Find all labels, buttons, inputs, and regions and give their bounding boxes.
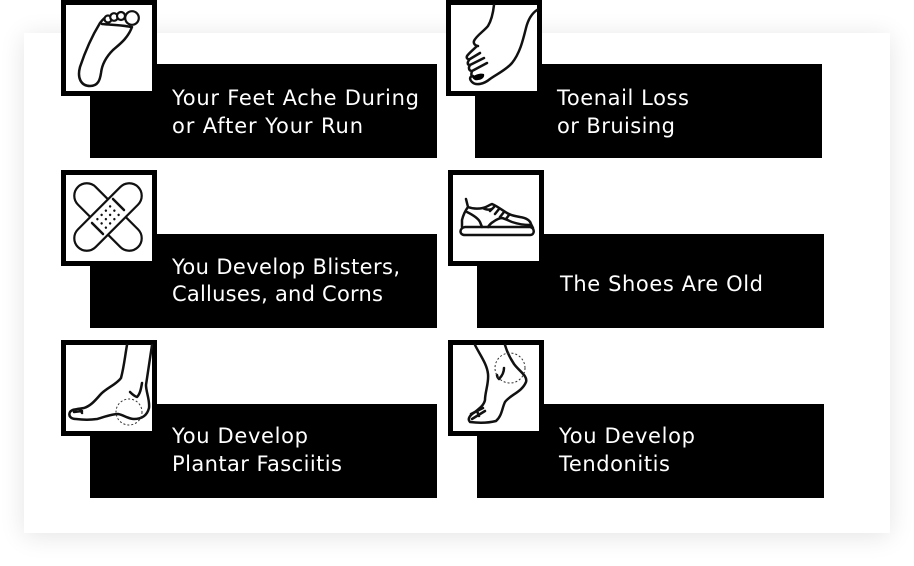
icon: foot sole xyxy=(64,2,154,94)
bruised toenail xyxy=(472,74,484,80)
label panel: plantar fasciitis: Plantar Fasciitis xyxy=(172,452,342,476)
icon: sneaker xyxy=(450,172,542,264)
label panel: toenail loss: Toenail Loss xyxy=(556,86,689,110)
bandage pad dots xyxy=(96,205,120,229)
dashed heel circle xyxy=(116,399,142,425)
label panel: tendonitis: You Develop xyxy=(558,424,695,448)
label panel: feet ache: Your Feet Ache During xyxy=(171,86,419,110)
item: feet ache xyxy=(64,2,437,158)
item: old shoes xyxy=(450,172,824,328)
label panel: feet ache xyxy=(90,64,437,158)
label panel: plantar fasciitis: You Develop xyxy=(171,424,308,448)
item: plantar fasciitis xyxy=(64,342,437,498)
label panel: blisters xyxy=(90,234,437,328)
icon: foot with achilles pain xyxy=(450,342,542,434)
label panel: blisters: You Develop Blisters, xyxy=(171,255,400,279)
icon: toes with bruised nail xyxy=(448,2,540,94)
achilles arrow xyxy=(497,368,504,379)
label panel: blisters: Calluses, and Corns xyxy=(172,282,383,306)
label panel: toenail loss xyxy=(475,64,822,158)
item: toenail loss xyxy=(448,2,822,158)
label panel: feet ache: or After Your Run xyxy=(172,114,363,138)
label panel: tendonitis xyxy=(477,404,824,498)
item: tendonitis xyxy=(450,342,824,498)
label panel: plantar fasciitis xyxy=(90,404,437,498)
label panel: toenail loss: or Bruising xyxy=(557,114,675,138)
item: blisters xyxy=(64,172,437,328)
shoe sole xyxy=(460,227,534,235)
label panel: old shoes: The Shoes Are Old xyxy=(559,272,763,296)
icon: crossed bandages xyxy=(64,172,154,264)
icon: foot side with heel pain xyxy=(64,342,154,434)
dashed achilles circle xyxy=(495,353,525,383)
label panel: old shoes xyxy=(477,234,824,328)
heel arrow xyxy=(130,383,142,397)
label panel: tendonitis: Tendonitis xyxy=(558,452,670,476)
